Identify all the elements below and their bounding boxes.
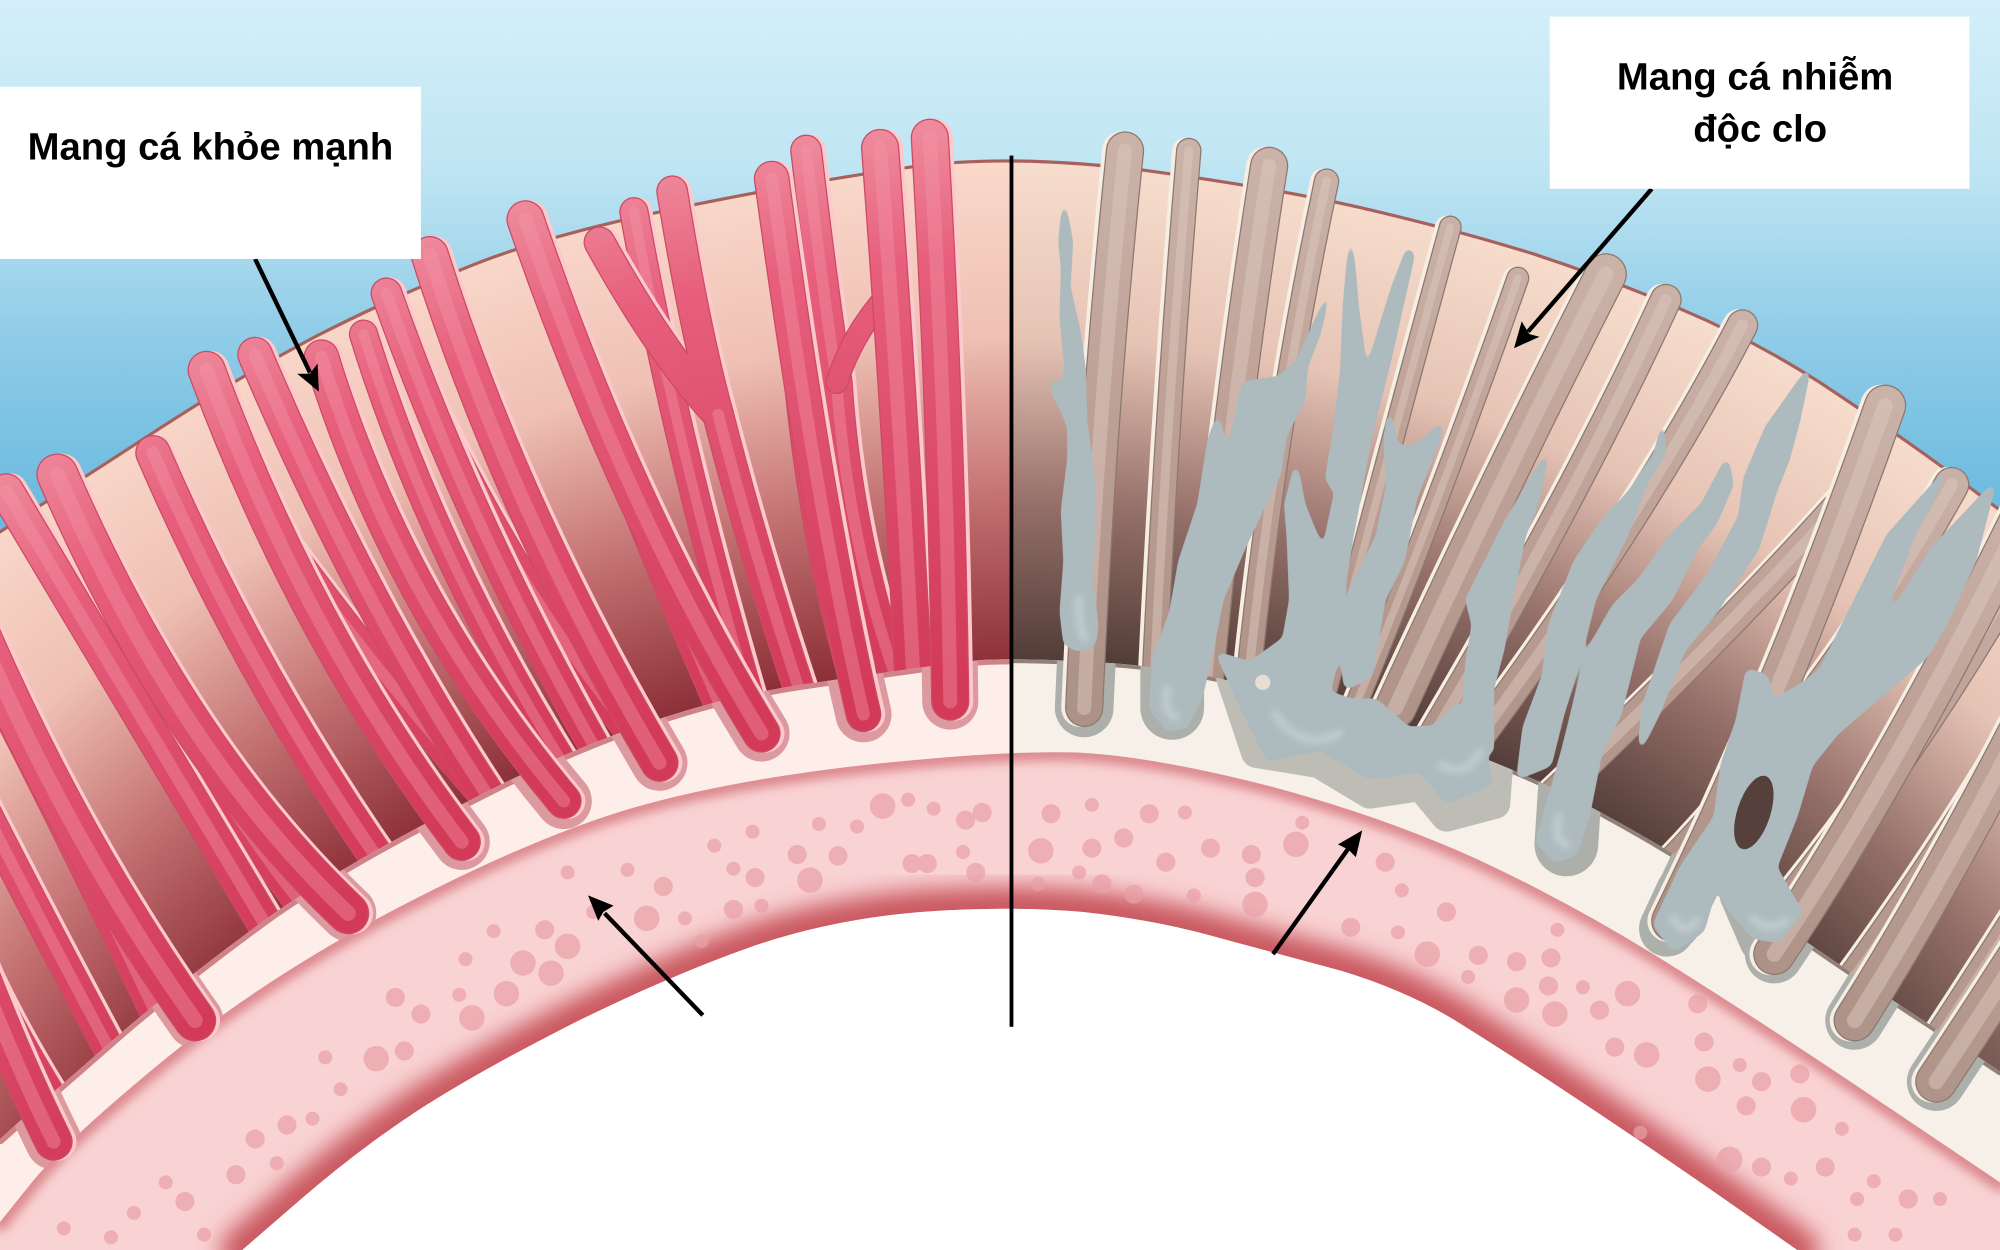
deposit details bbox=[1079, 599, 1786, 929]
label: healthy gill bbox=[0, 87, 421, 259]
label: chlorine-poisoned gill: Mang cá nhiễm bbox=[1617, 54, 1893, 98]
pale epithelial band bbox=[0, 638, 2000, 1250]
damaged back lamellae bbox=[1151, 151, 2000, 1097]
damaged foreground lamellae bbox=[1080, 151, 2000, 1082]
arrow: healthy tissue bbox=[588, 895, 703, 1015]
outer arc outline bbox=[0, 161, 2000, 532]
arrow: damaged filament bbox=[1514, 189, 1652, 348]
healthy gill interlamellar region bbox=[0, 162, 1010, 1139]
label: chlorine-poisoned gill bbox=[1550, 17, 1969, 189]
damaged gill interlamellar region bbox=[1013, 162, 2000, 1072]
grey chlorine deposits bbox=[1051, 198, 1995, 950]
arrow: damaged tissue bbox=[1273, 830, 1362, 954]
lamella base shadows bbox=[15, 660, 1985, 1168]
label: healthy gill: Mang cá khỏe mạnh bbox=[28, 125, 393, 168]
centre divider line bbox=[1010, 156, 1013, 1027]
healthy back lamellae bbox=[0, 148, 917, 1097]
arrow: healthy filament bbox=[255, 259, 319, 392]
white interior below the tissue bbox=[242, 909, 1797, 1250]
tissue spots bbox=[64, 800, 1940, 1237]
tissue layer bbox=[0, 740, 2000, 1250]
label: chlorine-poisoned gill: độc clo bbox=[1693, 108, 1827, 151]
healthy foreground lamellae bbox=[0, 138, 954, 1142]
